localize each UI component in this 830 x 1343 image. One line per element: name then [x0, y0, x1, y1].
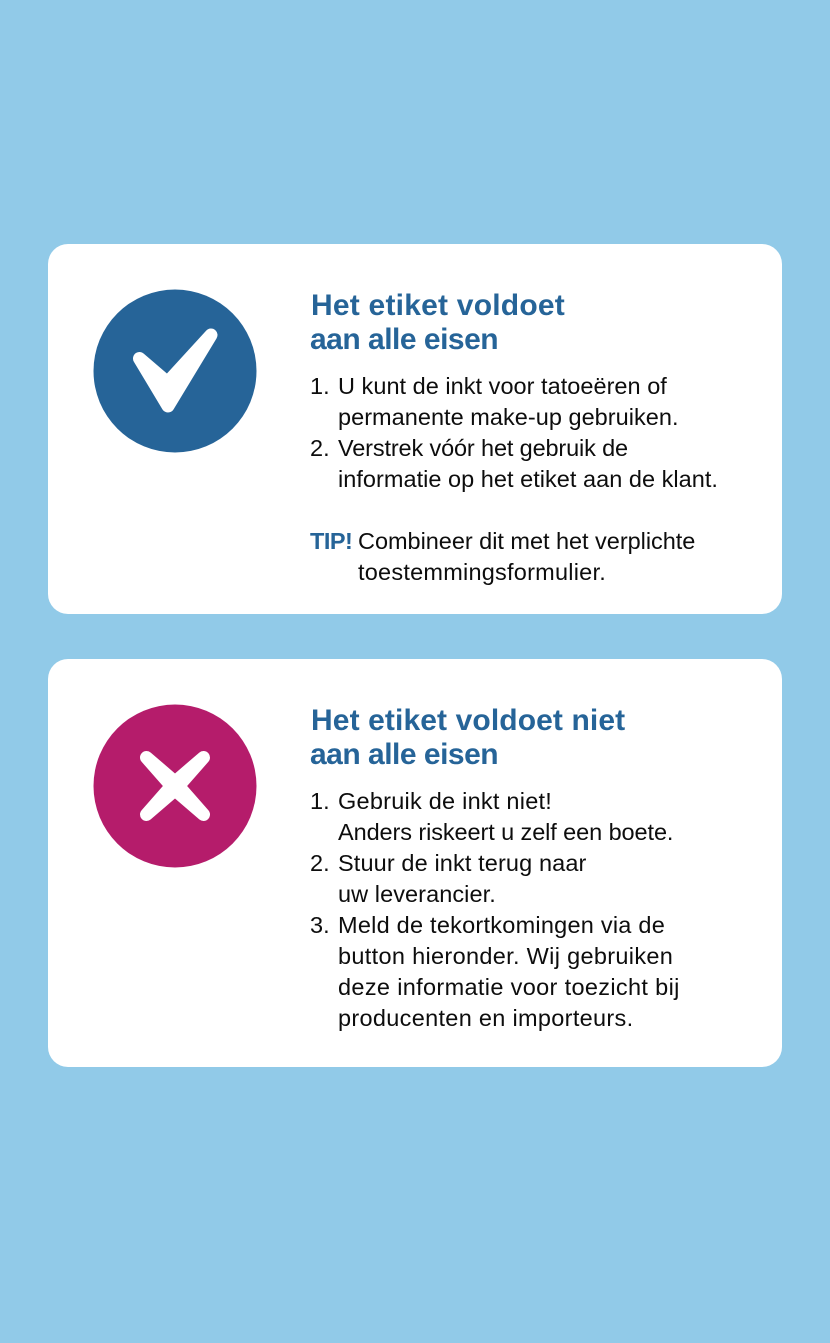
heading [310, 289, 565, 356]
heading: aan alle eisen [310, 323, 498, 356]
tip [310, 528, 695, 585]
numbered instructions [310, 373, 718, 492]
numbered instructions: 1. [310, 373, 330, 399]
icon: check mark [94, 290, 256, 452]
numbered instructions: 3. [310, 912, 330, 938]
numbered instructions: Meld de tekortkomingen via de [338, 912, 665, 938]
numbered instructions: deze informatie voor toezicht bij [338, 974, 680, 1000]
numbered instructions: 2. [310, 435, 330, 461]
numbered instructions: button hieronder. Wij gebruiken [338, 943, 673, 969]
numbered instructions: Verstrek vóór het gebruik de [338, 435, 628, 461]
numbered instructions: Gebruik de inkt niet! [338, 788, 552, 814]
numbered instructions: 1. [310, 788, 330, 814]
numbered instructions: Anders riskeert u zelf een boete. [338, 819, 673, 845]
numbered instructions: Stuur de inkt terug naar [338, 850, 586, 876]
numbered instructions: uw leverancier. [338, 881, 496, 907]
numbered instructions: 2. [310, 850, 330, 876]
heading: Het etiket voldoet [311, 289, 565, 322]
tip: Combineer dit met het verplichte [358, 528, 695, 554]
heading: aan alle eisen [310, 738, 498, 771]
tip: toestemmingsformulier. [358, 559, 606, 585]
numbered instructions [310, 788, 680, 1031]
numbered instructions: permanente make-up gebruiken. [338, 404, 679, 430]
panel: label does not meet requirements [48, 659, 782, 1067]
numbered instructions: informatie op het etiket aan de klant. [338, 466, 718, 492]
heading [310, 704, 625, 771]
panel: label meets all requirements [48, 244, 782, 614]
heading: Het etiket voldoet niet [311, 704, 625, 737]
tip: TIP! [310, 528, 352, 554]
icon: cross mark [94, 704, 256, 868]
numbered instructions: U kunt de inkt voor tatoeëren of [338, 373, 667, 399]
numbered instructions: producenten en importeurs. [338, 1005, 633, 1031]
